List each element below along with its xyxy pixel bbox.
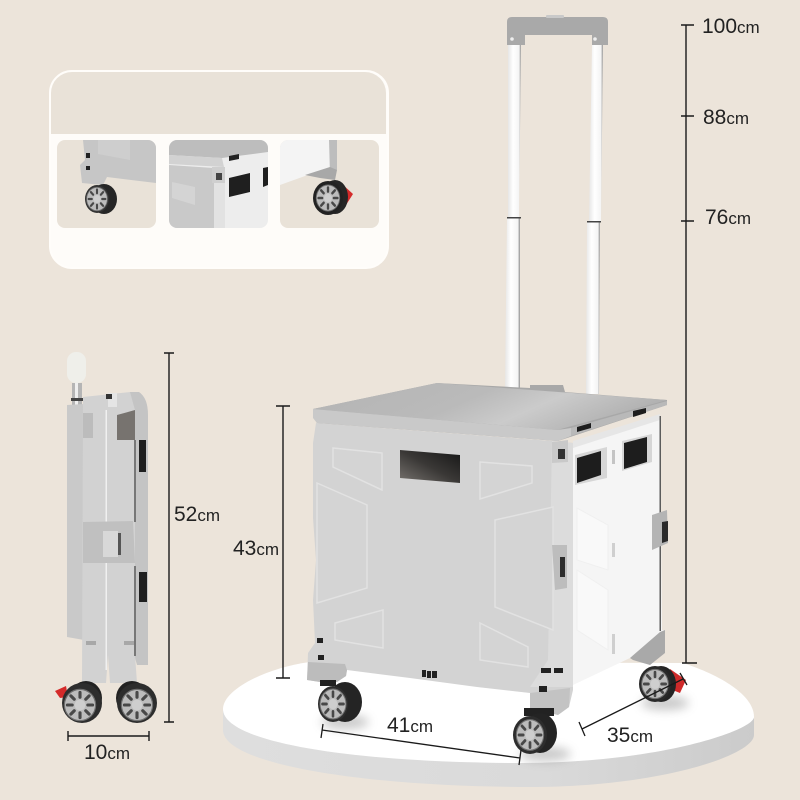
dimension: 43cm: 43cm [233,537,279,560]
dimension: height scale [681,15,760,663]
platform [223,662,754,787]
cart side panel [573,414,668,685]
folded cart handle knob [67,352,86,405]
dimension: 10cm [68,731,149,764]
thumbnail: left wheel [57,140,156,228]
cart carry window [400,450,460,483]
wheel: front right [513,708,557,754]
dimension: 43cm [233,406,290,678]
thumbnail: right wheel with red brake [280,140,379,228]
wheel: front left [318,680,362,722]
dimension: height scale: 88cm [703,106,749,129]
dimension: height scale: 100cm [702,15,760,38]
folded cart lid panel [130,392,148,665]
folded cart [55,352,157,723]
wheel: rear right [639,666,686,702]
unfolded cart [307,383,686,754]
soft wheel shadow [321,696,689,761]
dimension: 35cm [579,673,687,747]
folded cart body [82,392,137,683]
dimension: 41cm [321,714,521,765]
dimension: 41cm: 41cm [387,714,433,737]
dimension: 52cm [164,353,220,722]
cart front panel [307,423,573,715]
folded cart wheels [55,681,157,723]
dimension: height scale: 76cm [705,206,751,229]
dimension: 35cm: 35cm [607,724,653,747]
dimension: 52cm: 52cm [174,503,220,526]
dimension: 10cm: 10cm [84,741,130,764]
folded cart back panel [67,404,84,640]
panel: detail thumbnails [50,71,388,268]
thumbnail: lid corner [169,140,268,228]
telescopic handle [505,15,608,394]
cart lid [313,383,667,441]
folded cart slots [139,440,147,602]
